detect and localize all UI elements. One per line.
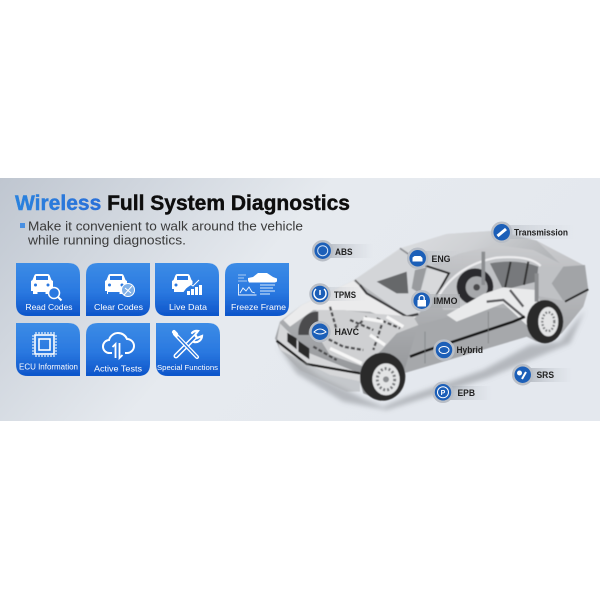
hood: [283, 281, 417, 327]
icon: car with bar chart: [172, 274, 202, 295]
callout: ABS: ABS: [335, 247, 352, 258]
ground shadow: [278, 310, 585, 410]
rear axle and chassis: [447, 273, 542, 325]
callout: Transmission: Transmission: [514, 228, 568, 238]
car body: [275, 231, 588, 400]
tile: Live Data: Live Data: [169, 302, 207, 312]
callout: SRS: [513, 365, 573, 384]
callout: Transmission: [492, 223, 577, 242]
callout: HAVC: [310, 322, 359, 341]
tile: Clear Codes: [86, 263, 150, 316]
rear cabin and window frame: [437, 256, 588, 310]
bullet text block: Make it convenient to walk around the vehicle: [28, 218, 303, 234]
rear wheel: [527, 300, 563, 343]
car illustration: [275, 231, 588, 410]
engine bay: [298, 307, 418, 367]
tile: Special Functions: [156, 323, 220, 376]
tile: Active Tests: Active Tests: [94, 364, 142, 374]
callout: Hybrid: [434, 340, 483, 360]
callout: TPMS: TPMS: [334, 290, 356, 301]
callout: HAVC: HAVC: [334, 327, 359, 338]
icon: chip: [32, 332, 57, 357]
side stripe and door lines: [410, 289, 588, 363]
icon: car with clear badge: [105, 274, 134, 296]
callout: ABS: [313, 241, 373, 260]
windshield and cabin: [355, 248, 449, 317]
front wheel: [360, 353, 405, 401]
banner background: [0, 178, 600, 421]
tile: Special Functions: Special Functions: [157, 363, 218, 372]
tile: Read Codes: Read Codes: [26, 302, 72, 312]
callout: EPB: [434, 383, 493, 402]
callout: ENG: [408, 249, 463, 268]
callout: SRS: SRS: [536, 370, 554, 381]
callout: IMMO: IMMO: [434, 296, 458, 306]
tile: Live Data: [155, 263, 219, 316]
callout: IMMO: [412, 291, 460, 310]
front grille and bumper: [277, 323, 360, 392]
title: Wireless Full System Diagnostics: [15, 191, 350, 215]
door panels: [403, 307, 537, 373]
bullet text block: [20, 218, 303, 248]
icon: cloud with arrows: [103, 333, 134, 358]
tile: Active Tests: [86, 323, 150, 376]
tile: Freeze Frame: Freeze Frame: [231, 302, 286, 312]
rear spare wheel and strut: [457, 252, 493, 305]
icon: car with magnifier: [31, 274, 62, 300]
callout: EPB: EPB: [458, 388, 475, 399]
callout: TPMS: [310, 284, 365, 304]
tile: Clear Codes: Clear Codes: [94, 302, 143, 312]
icon: crossed wrench and screwdriver: [174, 331, 202, 357]
tile: Read Codes: [16, 263, 80, 316]
bullet text block: while running diagnostics.: [27, 232, 186, 248]
callout: ENG: ENG: [432, 254, 450, 265]
callout: Hybrid: Hybrid: [456, 345, 483, 356]
roof glass: [353, 231, 560, 282]
callout: EPB: P: [441, 390, 446, 397]
icon: car with graphs: [238, 273, 277, 295]
tile: Freeze Frame: [225, 263, 289, 316]
tile: ECU Information: [16, 323, 80, 376]
tile: ECU Information: ECU Information: [19, 362, 78, 372]
